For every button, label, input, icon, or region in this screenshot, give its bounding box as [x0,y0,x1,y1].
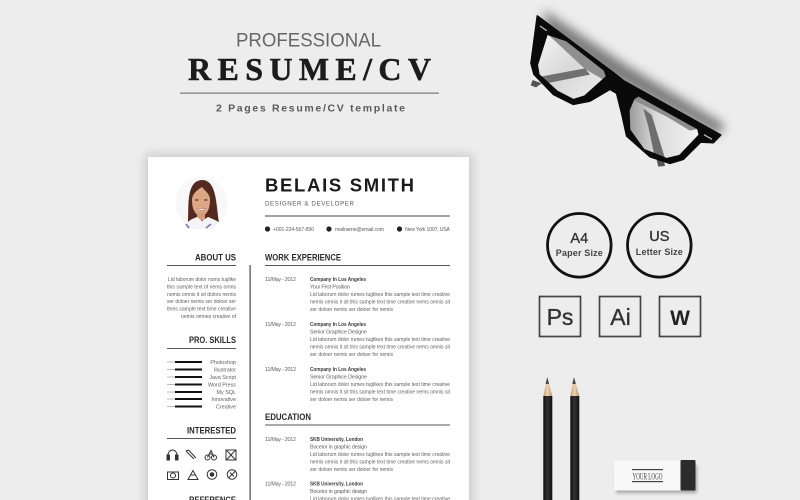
contact row [265,226,451,233]
icon: pencil 1 [543,377,552,500]
section: pro skills: Java Script [209,375,236,381]
section: pro skills [167,335,236,410]
skill bars [167,361,202,408]
work entry 1: Company In Los Angeles [310,277,366,283]
section: about us: ser doloer nemis ser doloer ser [167,299,236,305]
icon: word [660,296,700,336]
education entry 1: 11/May - 2012 [265,437,296,443]
section: education: EDUCATION [265,412,311,423]
section: education [265,412,450,500]
education entry 1 [265,437,450,473]
work entry 3: Lid laborum dolor rumes tuglikes this sample text time creative [310,382,450,388]
panel: resume page [145,154,473,500]
hobby icons [167,450,237,480]
subtitle: 2 Pages Resume/CV template [216,102,405,114]
icon: photoshop [540,296,580,336]
education entry 1: ser doloer nemis ser doloer for nemis [310,467,393,473]
work entry 3: 11/May - 2012 [265,367,296,373]
education entry 2: SKB University, London [310,482,363,488]
work entry 2: Lid laborum dolor rumes tuglikes this sample text time creative [310,337,450,343]
role: DESIGNER & DEVELOPER [265,200,355,207]
icon: eraser [614,460,697,493]
education entry 1: SKB University, London [310,437,363,443]
work entry 2: ser doloer nemis ser doloer for nemis [310,352,393,358]
work entry 1: Your First Position [310,284,350,290]
badge: a4 paper size: Paper Size [556,248,603,258]
section: work experience: WORK EXPERIENCE [265,252,341,264]
heading: resume/cv: RESUME/CV [188,51,431,87]
work entry 2: Senior Graphice Designe [310,330,367,336]
profile photo [176,177,228,229]
icon: glasses [531,10,725,167]
section: pro skills: Innovative [211,397,236,403]
badge: a4 paper size [548,214,611,277]
icon: word: W [670,307,690,330]
work entry 2: nemis omnis it sit this sample text time creative nems omnis sit [310,344,450,350]
section: work experience [265,252,450,403]
name: BELAIS SMITH [265,174,414,196]
section: interested [167,426,237,480]
icon: illustrator [600,296,640,336]
work entry 1: Lid laborum dolor rumes tuglikes this sample text time creative [310,292,450,298]
icon: illustrator: Ai [610,304,631,330]
icon: pencil 2 [570,377,579,500]
work entry 3: Senior Graphice Designe [310,374,367,380]
education entry 1: nemis omnis it sit this sample text time creative nems omnis sit [310,460,450,466]
work entry 3: ser doloer nemis ser doloer for nemis [310,397,393,403]
work entry 1 [265,277,450,313]
heading: professional: PROFESSIONAL [236,30,381,52]
icon: eraser: YOUR LOGO [632,472,663,482]
work entry 1: nemis omnis it sit this sample text time creative nems omnis sit [310,300,450,306]
section: pro skills: Creative [216,404,236,410]
education entry 2 [265,482,450,500]
badge: a4 paper size: A4 [570,231,588,247]
work entry 1: ser doloer nemis ser doloer for nemis [310,307,393,313]
education entry 2: 11/May - 2012 [265,482,296,488]
section: about us [167,252,236,320]
section: about us: nemis omnis it sit dolors nemis [167,292,236,298]
work entry 2: Company In Los Angeles [310,322,366,328]
work entry 3 [265,367,450,403]
section: pro skills: Word Press [208,382,236,388]
work entry 2 [265,322,450,358]
section: about us: this sample text of nems omns [167,284,236,290]
contact row: New York 1007, USA [405,227,451,233]
section: about us: Lid laborum dolor nums tuglike [168,277,236,283]
education entry 1: Boceior in graphic design [310,444,367,450]
section: interested: INTERESTED [187,426,236,436]
title block [180,30,439,114]
education entry 2: Boceior in graphic design [310,489,367,495]
section: about us: nemis omnes creative of [181,314,236,320]
work entry 3: Company In Los Angeles [310,367,366,373]
icon: photoshop: Ps [547,304,573,330]
badge: us letter size [628,214,691,277]
section: pro skills: My SQL [217,390,236,396]
work entry 1: 11/May - 2012 [265,277,296,283]
badge: us letter size: US [649,229,669,245]
section: pro skills: Photoshop [210,360,236,366]
contact row: +001-234-567-890 [273,227,314,233]
section: pro skills: PRO. SKILLS [189,335,236,346]
education entry 1: Lid laborum dolor rumes tuglikes this sample text time creative [310,452,450,458]
work entry 2: 11/May - 2012 [265,322,296,328]
section: about us: ABOUT US [195,252,236,264]
badge: us letter size: Letter Size [636,247,683,257]
work entry 3: nemis omnis it sit this sample text time creative nems omnis sit [310,390,450,396]
contact row: mailname@email.com [335,227,384,233]
section: pro skills: Illustrator [214,368,236,374]
section: about us: theis sample text time creative [167,306,236,312]
